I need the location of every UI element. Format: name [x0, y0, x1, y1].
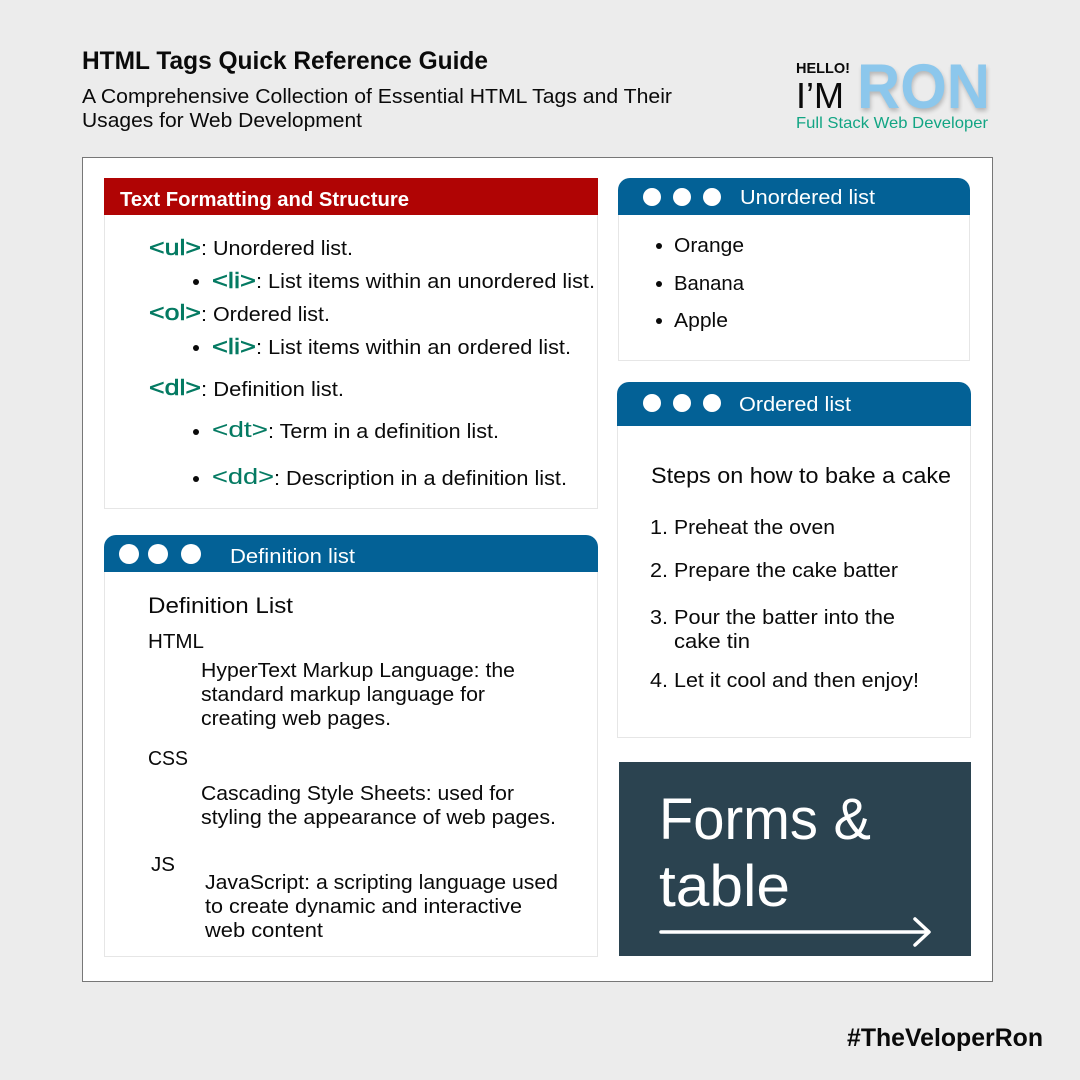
logo: Hello I'm Ron: HELLO!: [796, 60, 850, 77]
window dots: [119, 544, 201, 564]
ol entry: <ol>: [149, 300, 201, 325]
arrow: [661, 919, 929, 945]
hashtag: #TheVeloperRon: [847, 1024, 1043, 1052]
panel: definition list: HTML: [148, 630, 204, 653]
panel: definition list: JS: [151, 853, 175, 876]
panel: definition list: CSS: [148, 747, 188, 770]
panel: definition list: Definition list: [230, 545, 355, 568]
window dots: [643, 394, 721, 412]
dl entry: <dl>: [149, 375, 201, 400]
panel: definition list: [104, 535, 598, 956]
dd entry: : Description in a definition list.: [274, 467, 567, 490]
ordered steps: 1.: [650, 516, 668, 539]
panel: text formatting and structure: [104, 178, 598, 508]
callout: forms and table: [619, 762, 971, 956]
dt entry: : Term in a definition list.: [268, 420, 499, 443]
ordered steps: cake tin: [674, 630, 750, 653]
callout: forms and table: Forms &: [659, 787, 871, 852]
ordered steps: Pour the batter into the: [674, 606, 895, 629]
list items: Orange: [674, 234, 744, 257]
ol entry: : Ordered list.: [201, 303, 330, 326]
dl entry: [149, 375, 344, 401]
ordered steps: [650, 516, 919, 692]
li entry: <li>: [212, 334, 256, 359]
panel: text formatting and structure: Text Formatting and Structure: [120, 188, 409, 211]
li entry: <li>: [212, 268, 256, 293]
panel: unordered list: Unordered list: [740, 186, 875, 209]
panel: ordered list: Ordered list: [739, 393, 851, 416]
panel: definition list: Definition List: [148, 593, 293, 618]
CSS definition: styling the appearance of web pages.: [201, 806, 556, 829]
title: HTML Tags Quick Reference Guide: [82, 47, 488, 75]
logo: Hello I'm Ron: Full Stack Web Developer: [796, 115, 989, 132]
subtitle: A Comprehensive Collection of Essential HTML Tags and Their: [82, 85, 672, 108]
dd entry: [193, 464, 567, 490]
CSS definition: Cascading Style Sheets: used for: [201, 782, 514, 805]
ol entry: [149, 300, 330, 326]
dt entry: [193, 417, 499, 443]
ordered steps: 4.: [650, 669, 668, 692]
dd entry: <dd>: [212, 464, 274, 489]
JS definition: to create dynamic and interactive: [205, 895, 522, 918]
logo: Hello I'm Ron: RON: [857, 52, 990, 122]
ordered steps: Let it cool and then enjoy!: [674, 669, 919, 692]
dt entry: <dt>: [212, 417, 268, 442]
panel: ordered list: Steps on how to bake a cake: [651, 463, 951, 488]
logo: Hello I'm Ron: I’M: [796, 75, 844, 116]
panel: ordered list: [617, 382, 971, 738]
ordered steps: 3.: [650, 606, 668, 629]
JS definition: [204, 871, 558, 942]
JS definition: JavaScript: a scripting language used: [205, 871, 558, 894]
HTML definition: standard markup language for: [201, 683, 485, 706]
subtitle: [82, 85, 672, 132]
CSS definition: [201, 782, 556, 829]
window dots: [643, 188, 721, 206]
HTML definition: [201, 659, 515, 730]
li entry: : List items within an unordered list.: [256, 270, 595, 293]
HTML definition: HyperText Markup Language: the: [201, 659, 515, 682]
panel: unordered list: [618, 178, 970, 360]
ul entry: [149, 235, 353, 260]
li entry: : List items within an ordered list.: [256, 336, 571, 359]
ul entry: : Unordered list.: [201, 237, 353, 260]
HTML definition: creating web pages.: [201, 707, 391, 730]
JS definition: web content: [204, 919, 323, 942]
logo: Hello I'm Ron: RON: [858, 55, 991, 125]
callout: forms and table: table: [659, 854, 790, 919]
ordered steps: 2.: [650, 559, 668, 582]
ordered steps: Preheat the oven: [674, 516, 835, 539]
list items: Banana: [674, 272, 745, 295]
main panel: [82, 158, 992, 982]
ordered steps: Prepare the cake batter: [674, 559, 898, 582]
ul entry: <ul>: [149, 235, 201, 260]
list items: [656, 234, 745, 332]
dl entry: : Definition list.: [201, 378, 344, 401]
logo: Hello I'm Ron: [796, 52, 991, 132]
list items: Apple: [674, 309, 728, 332]
subtitle: Usages for Web Development: [82, 109, 362, 132]
